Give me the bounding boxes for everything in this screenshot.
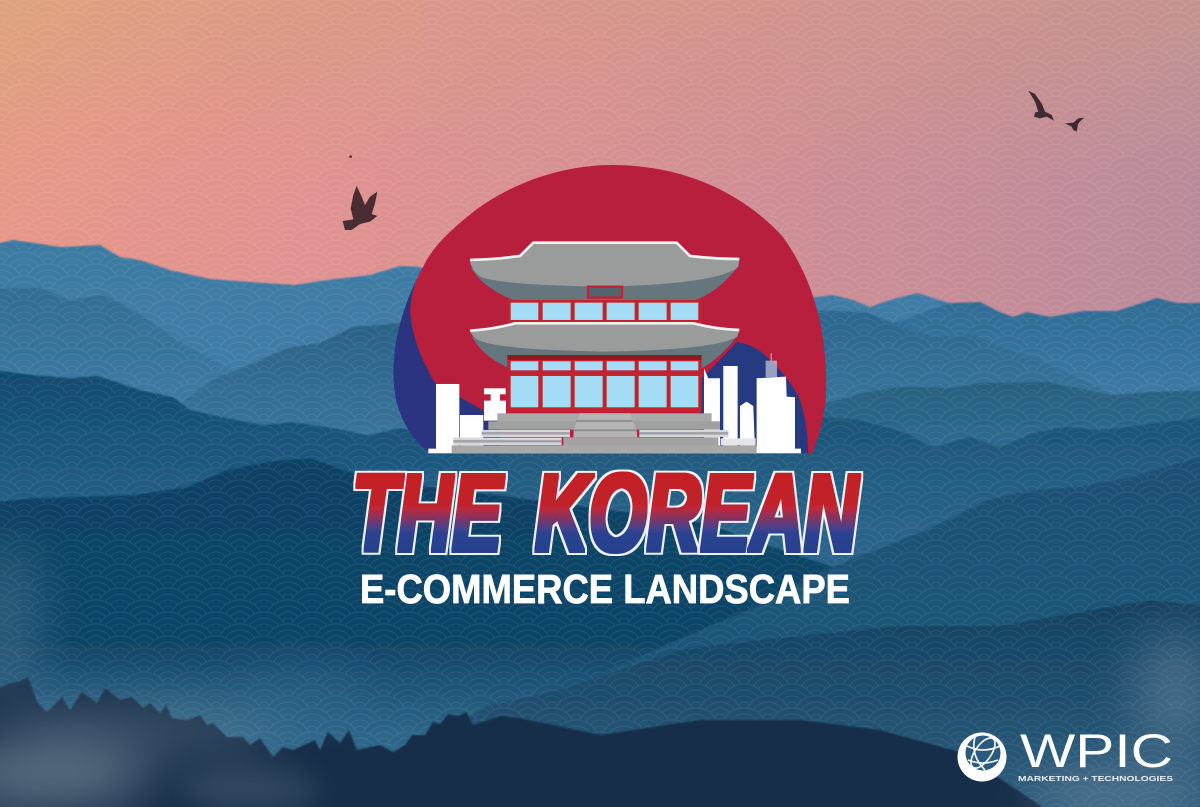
WPIC logo: [958, 724, 1173, 783]
upper roof: [471, 266, 739, 300]
emblem: sun, palace and skyline: [393, 165, 826, 453]
fog: [0, 540, 1200, 807]
globe icon: [958, 732, 1006, 782]
birds: pair top right: [1028, 91, 1084, 132]
city skyline: [428, 353, 801, 453]
bird: large silhouette left: [343, 155, 377, 230]
palace stairs: [452, 413, 757, 453]
red sun: [410, 165, 826, 453]
title: THE KOREAN: [352, 452, 860, 575]
logo tagline: MARKETING + TECHNOLOGIES: [1018, 774, 1173, 783]
title: THE KOREAN: KOREAN: [535, 452, 860, 575]
palace: [470, 243, 739, 412]
mountain ranges: [0, 240, 1200, 807]
WPIC wordmark: WPIC: [1020, 724, 1173, 777]
sky background: [0, 0, 1200, 400]
upper floor: [507, 299, 702, 324]
tree line silhouette: [0, 677, 1050, 807]
blue swirl left: [393, 268, 500, 453]
blue swirl right: [700, 342, 808, 453]
subtitle: E-COMMERCE LANDSCAPE: [360, 566, 850, 612]
title: THE KOREAN: THE: [352, 452, 504, 575]
lower roof: [472, 336, 737, 368]
lower floor: [507, 355, 702, 412]
